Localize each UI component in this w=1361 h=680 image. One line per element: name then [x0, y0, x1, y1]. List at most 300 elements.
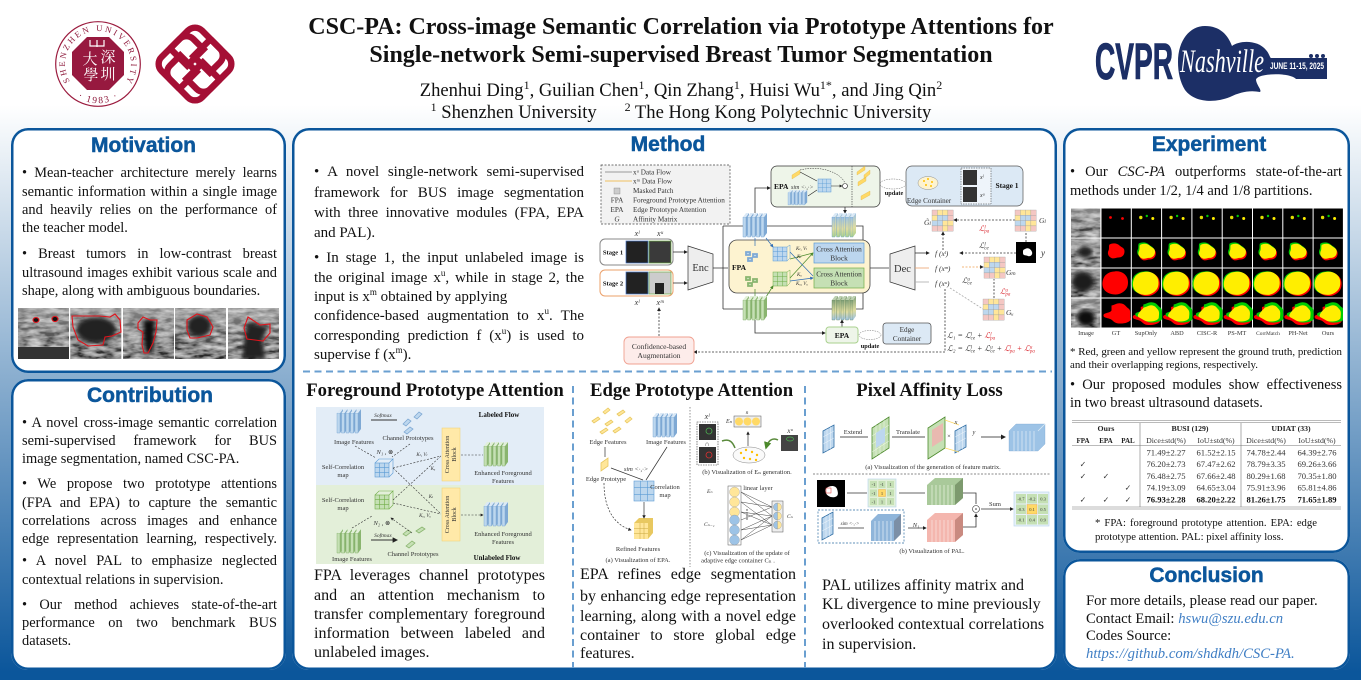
affinity matrices and predictions: Gᵤ [1006, 308, 1014, 317]
figure: EPA detail: (a) Visualization of EPA. [606, 557, 671, 564]
table: ablation results: IoU±std(%) [1197, 436, 1235, 445]
table: ablation results: ✓ [1080, 460, 1086, 469]
affinity matrices and predictions: G̃ₗ [924, 218, 931, 227]
text: FPA description: and an attention mechanism to [314, 587, 545, 604]
EPA lower and edge container: Edge [900, 326, 914, 334]
figure: EPA detail: sim <·,·> [624, 466, 648, 473]
figure: FPA detail: Kₗ [428, 495, 433, 500]
text: abbreviations note [1095, 517, 1317, 543]
authors: Zhenhui Ding1, Guilian Chen1, Qin Zhang1, Huisi Wu1*, and Jing Qin2 [420, 78, 942, 101]
text: method bullets: corresponding prediction f (xu) is used to [314, 326, 584, 344]
figure: FPA detail: Kₗ, Vₗ [415, 453, 428, 458]
stage inputs: Stage 2 [603, 280, 624, 288]
table: ablation results: 74.19±3.09 [1146, 482, 1186, 492]
loss formulas: pa [1029, 350, 1035, 354]
text: EPA description: learning, along with a novel edge [580, 608, 796, 625]
text: PAL description: overlooked contextual correlations [822, 616, 1044, 633]
figure: segmentation comparison grid: Image [1078, 330, 1094, 337]
figure: PAL detail: -0.3 [1017, 507, 1025, 512]
EPA lower and edge container: EPA [835, 331, 850, 340]
loss formulas: ℒ [984, 331, 990, 340]
text: FPA description: information between labeled and [314, 625, 545, 642]
affinity matrices and predictions: l [984, 226, 986, 230]
figure: EPA detail: Cₙ [787, 514, 793, 520]
logo: Shenzhen University seal: 學 [83, 64, 99, 85]
FPA block: Cross Attention [816, 270, 862, 278]
text: contribution bullets: correlations across images and enhance [22, 513, 277, 529]
figure: PAL detail: 1 [889, 482, 892, 487]
text: abbreviations note: * FPA: foreground prototype attention. EPA: edge [1095, 517, 1317, 529]
text: method bullets: confidence-based augmentation to xu. The [314, 306, 584, 324]
table: ablation results: 75.91±3.96 [1246, 482, 1286, 492]
text: contribution bullets: • A novel PAL to emphasize neglected [22, 553, 277, 569]
loss formulas: ℒ₂ = ℒ [947, 344, 971, 353]
text: colour note: and their overlapping regions, respectively. [1070, 359, 1258, 371]
logo: CVPR Nashville guitar [1095, 26, 1327, 101]
text: motivation bullets: ultrasound images exhibit various scale and [22, 265, 277, 281]
loss formulas: ce [971, 350, 976, 354]
figure: PAL detail: (a) Visualization of the generation of feature matrix. [865, 464, 1001, 471]
FPA block: FPA [732, 263, 747, 272]
loss formulas: ℒ₁ = ℒ [947, 331, 971, 340]
title [308, 14, 1054, 68]
figure: FPA detail: Unlabeled Flow [474, 554, 521, 562]
loss formulas: ce [971, 336, 976, 342]
figure: FPA detail: Enhanced Foreground [474, 531, 533, 538]
figure: EPA detail: Correlation [650, 484, 681, 491]
table: ablation results: 71.49±2.27 [1146, 448, 1186, 458]
figure: EPA detail: Image Features [646, 439, 686, 446]
FPA block: Block [830, 278, 848, 288]
text: EPA description: EPA refines edge segmentation [580, 566, 796, 583]
text: method bullets: with three innovative modules (FPA, EPA [314, 205, 584, 221]
legend: FPA [611, 196, 624, 204]
affinity matrices and predictions: ℒ [979, 224, 984, 233]
heading: motivation: Motivation [91, 134, 196, 157]
logo: Shenzhen University seal: 圳 [100, 63, 116, 84]
table: ablation results: 61.52±2.15 [1196, 448, 1236, 458]
figure: FPA detail: Image Features [332, 556, 372, 563]
affinity matrices and predictions: ℒ [962, 276, 967, 285]
text: experiment intro: • Our CSC-PA outperforms state-of-the-art [1070, 164, 1342, 180]
table: ablation results: 64.65±3.04 [1196, 482, 1236, 492]
affinity matrices and predictions: f (xᵘ) [935, 279, 950, 288]
loss formulas: l [1010, 346, 1012, 350]
figure: segmentation comparison grid: PS-MT [1228, 330, 1246, 337]
figure: EPA detail: Edge Prototype [586, 476, 626, 483]
table: ablation results: 80.29±1.68 [1246, 471, 1286, 481]
figure: EPA detail: (c) Visualization of the update of [704, 550, 791, 557]
EPA lower and edge container: Container [893, 335, 922, 343]
figure: PAL detail: -0.1 [1017, 518, 1025, 522]
stage inputs: xˡ [634, 229, 640, 238]
figure: PAL detail: 0.1 [1029, 507, 1035, 512]
legend [601, 165, 730, 224]
confidence-based augmentation: Augmentation [638, 351, 681, 360]
text: contribution bullets: (FPA and EPA) to capture the semantic [22, 495, 277, 511]
FPA block: Block [830, 254, 848, 262]
text: contribution bullets: • Our method achieves state-of-the-art [22, 597, 277, 613]
figure: PAL detail: -1 [872, 500, 875, 504]
affinity matrices and predictions: y [1040, 248, 1045, 258]
text: method bullets: input is xm obtained by applying [314, 287, 507, 305]
table: ablation results: 70.35±1.80 [1297, 471, 1337, 481]
text: method bullets: • A novel single-network semi-supervised [314, 164, 584, 180]
figure: PAL detail: × [947, 433, 951, 440]
text: PAL description [822, 577, 1044, 653]
text: FPA description: transfer complementary foreground [314, 606, 545, 623]
table: ablation results: Ours [1098, 424, 1114, 433]
heading: foreground prototype attention: Foreground Prototype Attention [306, 380, 564, 401]
text: method bullets [314, 164, 584, 363]
table: ablation results: Dice±std(%) [1146, 436, 1186, 445]
figure: FPA detail [316, 407, 544, 564]
figure: PAL detail: -1 [872, 482, 875, 487]
figure: PAL detail: 1 [881, 491, 883, 496]
heading: edge prototype attention: Edge Prototype Attention [590, 380, 793, 401]
FPA block: Kᵤ, Vᵤ [795, 282, 808, 287]
logo: Shenzhen University seal: 深 [100, 46, 116, 67]
loss formulas: l [971, 332, 973, 338]
affinity matrices and predictions: ℒ [979, 241, 984, 250]
figure: PAL detail: -0.7 [1017, 496, 1025, 502]
table: ablation results: Dice±std(%) [1246, 436, 1286, 445]
table: ablation results: ✓ [1080, 472, 1086, 481]
divider [303, 370, 1052, 668]
FPA block: Kₗ [796, 255, 802, 260]
table: ablation results: 67.66±2.48 [1196, 471, 1236, 481]
confidence-based augmentation [624, 337, 694, 364]
heading: experiment: Experiment [1152, 133, 1266, 156]
figure: FPA detail: Softmax [374, 532, 392, 539]
text: EPA description [580, 566, 796, 662]
figure: EPA detail: adaptive edge container Cₙ . [701, 558, 775, 564]
panel: conclusion [1063, 559, 1350, 670]
stage inputs: Stage 1 [603, 250, 623, 256]
affinity matrices and predictions: pa [983, 230, 990, 234]
affinity matrices and predictions: u [967, 278, 970, 282]
loss formulas: + [995, 344, 1004, 353]
text: experiment intro: methods under 1/2, 1/4 and 1/8 partitions. [1070, 183, 1312, 199]
encoder and decoder: Dec [894, 264, 911, 275]
stage inputs: xᵐ [656, 298, 664, 307]
text: contribution bullets: image segmentation, named CSC-PA. [22, 451, 239, 467]
panel: contribution [11, 379, 286, 670]
figure: EPA detail: ∩ [705, 441, 709, 448]
legend: xᵘ Data Flow [633, 168, 672, 176]
text: experiment second bullet [1070, 377, 1342, 411]
heading: conclusion: Conclusion [1149, 564, 1264, 587]
loss formulas: + ℒ [975, 344, 990, 353]
figure: PAL detail: -0.2 [1028, 496, 1036, 502]
figure: EPA detail: Cₙ₋₁ [704, 522, 715, 528]
table: ablation results: UDIAT (33) [1271, 424, 1311, 433]
legend: Edge Prototype Attention [633, 206, 706, 214]
loss formulas: + [975, 331, 984, 340]
figure: FPA detail: Self-Correlation [322, 497, 365, 504]
FPA block [729, 238, 870, 297]
figure: PAL detail: Extend [844, 429, 863, 436]
affinity matrices and predictions [924, 210, 1046, 320]
text: FPA description: unlabeled images. [314, 644, 430, 661]
stage 1 edge container: xᵘ [979, 193, 985, 199]
EPA upper panel: sim <·,·> [791, 185, 813, 191]
panel: method [292, 128, 1057, 670]
figure: PAL detail: (b) Visualization of PAL. [899, 548, 965, 555]
panel: motivation [11, 128, 286, 373]
table: ablation results: ✓ [1125, 484, 1131, 492]
confidence-based augmentation: Confidence-based [632, 342, 686, 351]
text: colour note: * Red, green and yellow represent the ground truth, prediction [1070, 346, 1342, 358]
figure: segmentation comparison grid: GT [1112, 330, 1120, 337]
logo: Shenzhen University seal: SHENZHEN UNIVERSITY [59, 25, 137, 84]
text: experiment intro [1070, 164, 1342, 199]
heading: method: Method [631, 133, 705, 156]
loss formulas: u [1030, 346, 1033, 350]
text: method bullets: and PAL). [314, 225, 375, 241]
figure: FPA detail: N₂ , ⊗ [373, 520, 390, 527]
loss formulas: ce [990, 350, 995, 354]
table: ablation results: 76.20±2.73 [1146, 459, 1186, 469]
figure: FPA detail: Labeled Flow [479, 411, 520, 419]
figure: FPA detail: map [337, 472, 349, 479]
figure: segmentation comparison grid: CISC-R [1197, 330, 1218, 337]
legend: Foreground Prototype Attention [633, 196, 725, 204]
figure: PAL detail: 0.9 [1040, 518, 1047, 522]
table: ablation results: 78.79±3.35 [1246, 459, 1286, 469]
logo: CVPR Nashville guitar: Nashville [1179, 44, 1264, 80]
text: contribution bullets: semi-supervised framework for BUS [22, 433, 277, 449]
figure: PAL detail: 0.4 [1029, 518, 1036, 522]
text: method bullets: the original image xu, while in stage 2, the [314, 268, 584, 286]
text: conclusion links [1086, 593, 1318, 662]
affinity matrices and predictions: l [984, 242, 986, 248]
text: contribution bullets: performance on two benchmark BUS [22, 615, 277, 631]
text: motivation bullets: shape, along with ambiguous boundaries. [22, 283, 260, 299]
table: ablation results: 65.81±4.86 [1297, 482, 1337, 492]
chart: method architecture diagram [600, 164, 1046, 364]
encoder and decoder: Enc [692, 263, 709, 274]
text: motivation bullets: • Mean-teacher architecture merely learns [22, 165, 277, 181]
figure: FPA detail: Features [492, 539, 514, 546]
affinity matrices and predictions: ce [967, 282, 973, 286]
legend: G [614, 216, 620, 224]
figure: FPA detail: Image Features [334, 439, 374, 446]
figure: EPA detail: xᵘ [786, 427, 794, 435]
text: contribution bullets: • A novel cross-image semantic correlation [22, 415, 277, 431]
figure: FPA detail: Block [452, 507, 458, 522]
affiliations: 1 Shenzhen University 2 The Hong Kong Polytechnic University [431, 100, 931, 123]
legend: Masked Patch [633, 187, 674, 195]
figure: EPA detail: Edge Features [589, 439, 627, 446]
figure: FPA detail: Channel Prototypes [382, 435, 434, 442]
figure: EPA detail: Eₙ [706, 489, 713, 495]
legend: EPA [611, 206, 624, 214]
figure: segmentation comparison grid [1071, 208, 1343, 337]
figure: FPA detail: Softmax [374, 412, 392, 419]
text: FPA description [314, 567, 545, 661]
figure: PAL detail: -1 [880, 482, 884, 487]
loss formulas: l [990, 332, 992, 338]
logo: Hong Kong Polytechnic University [155, 24, 234, 104]
table: ablation results [1072, 420, 1341, 510]
figure: PAL detail: Sum [989, 501, 1001, 508]
affinity matrices and predictions: pa [1004, 292, 1011, 298]
legend: xᵐ Data Flow [633, 178, 673, 186]
text: motivation bullets: semantic information within a single image [22, 184, 277, 200]
text: method bullets: • In stage 1, the input unlabeled image is [314, 250, 584, 266]
flow arrows [659, 188, 1026, 352]
heading: pixel affinity loss: Pixel Affinity Loss [856, 380, 1003, 401]
FPA block: Cross Attention [816, 244, 862, 254]
table: ablation results: ✓ [1103, 496, 1109, 504]
table: ablation results: 69.26±3.66 [1297, 459, 1337, 469]
EPA upper panel: EPA [774, 182, 789, 191]
stage inputs [600, 229, 673, 307]
figure: ultrasound examples [18, 308, 279, 359]
figure: segmentation comparison grid: PH-Net [1288, 330, 1308, 337]
figure: PAL detail: sim <·,·> [841, 522, 859, 527]
text: FPA description: FPA leverages channel prototypes [314, 567, 545, 584]
figure: FPA detail: Features [492, 478, 514, 485]
figure: FPA detail: Cross Attention [445, 496, 451, 533]
stage 1 edge container: Stage 1 [995, 181, 1019, 190]
affinity matrices and predictions: Gₗ [1039, 216, 1046, 225]
figure: FPA detail: Block [452, 447, 458, 462]
text: EPA description: container to store global edge [580, 627, 796, 644]
table: ablation results: PAL [1121, 437, 1135, 445]
figure: FPA detail: Kᵤ, Vᵤ [418, 514, 431, 519]
figure: FPA detail: Self-Correlation [322, 464, 365, 471]
table: ablation results: ✓ [1080, 496, 1086, 504]
stage 1 edge container: Edge Container [907, 197, 952, 205]
text: experiment second bullet: in two breast ultrasound datasets. [1070, 395, 1263, 411]
panel: experiment [1063, 128, 1350, 553]
affinity matrices and predictions: ℒ [1000, 287, 1005, 296]
affinity matrices and predictions: Gₘ [1006, 268, 1016, 277]
EPA lower and edge container: update [861, 343, 879, 350]
figure: PAL detail: 1 [889, 500, 892, 504]
feature stacks [743, 213, 856, 320]
figure: EPA detail: map [659, 492, 671, 499]
text: experiment second bullet: • Our proposed modules show effectiveness [1070, 377, 1342, 393]
text: motivation bullets [22, 165, 278, 299]
affinity matrices and predictions: u [1005, 288, 1008, 294]
loss formulas: pa [989, 336, 996, 342]
figure: FPA detail: Cross Attention [445, 436, 451, 473]
loss formulas: l [971, 346, 973, 350]
text: contribution bullets: • We propose two prototype attentions [22, 476, 277, 492]
figure: PAL detail: 1 [889, 491, 892, 496]
text: motivation bullets: and heavily relies on the performance of [22, 202, 277, 218]
table: ablation results: FPA [1076, 437, 1090, 445]
figure: segmentation comparison grid: CorrMatch [1256, 331, 1280, 337]
EPA upper panel [771, 166, 906, 207]
EPA lower and edge container [826, 323, 931, 350]
figure: EPA detail: linear layer [743, 485, 774, 492]
figure: EPA detail: (b) Visualization of Eₙ generation. [702, 469, 792, 476]
text: conclusion links: Contact Email: hswu@szu.edu.cn [1086, 611, 1283, 627]
figure: EPA detail: Refined Features [616, 546, 661, 553]
text: conclusion links: https://github.com/shdkdh/CSC-PA. [1086, 646, 1295, 662]
figure: FPA detail: Enhanced Foreground [474, 470, 533, 477]
table: ablation results: BUSI (129) [1171, 424, 1209, 433]
loss formulas: + ℒ [1015, 344, 1030, 353]
figure: segmentation comparison grid: SupOnly [1135, 330, 1158, 337]
text: PAL description: in supervision. [822, 636, 916, 653]
figure: PAL detail: 0.5 [1040, 507, 1047, 512]
title: Single-network Semi-supervised Breast Tumor Segmentation [369, 42, 993, 68]
table: ablation results: 71.65±1.89 [1297, 494, 1337, 504]
figure: PAL detail: y [972, 429, 976, 436]
text: contribution bullets [22, 415, 277, 649]
FPA block: Kₗ, Vₗ [795, 247, 807, 252]
text: contribution bullets: edge representation learning, respectively. [22, 531, 277, 547]
EPA upper panel: update [885, 190, 903, 197]
stage inputs: xˡ [634, 298, 640, 307]
table: ablation results: 67.47±2.62 [1196, 459, 1236, 469]
figure: EPA detail: xˡ [704, 412, 710, 421]
figure: FPA detail: Kᵤ [430, 467, 436, 472]
text: method bullets: supervise f (xm). [314, 345, 411, 363]
text: motivation bullets: • Breast tumors in low-contrast breast [22, 246, 277, 262]
table: ablation results: ✓ [1103, 472, 1109, 481]
logo: Shenzhen University seal [55, 21, 141, 107]
stage 1 edge container: xˡ [979, 175, 985, 181]
figure: EPA detail [586, 407, 798, 567]
figure: EPA detail: n [746, 410, 749, 416]
text: method bullets: framework for BUS image segmentation [314, 185, 584, 201]
figure: PAL detail: x [954, 419, 958, 426]
table: ablation results: 76.93±2.28 [1146, 494, 1186, 504]
text: PAL description: PAL utilizes affinity matrix and [822, 577, 1024, 594]
text: contribution bullets: contextual relations in supervision. [22, 572, 223, 588]
logo: CVPR Nashville guitar: CVPR [1095, 33, 1173, 90]
text: conclusion links: For more details, please read our paper. [1086, 593, 1318, 609]
logo: Shenzhen University seal: 大 [82, 48, 98, 69]
text: conclusion links: Codes Source: [1086, 628, 1171, 644]
affinity matrices and predictions: f (xᵐ) [935, 264, 951, 273]
text: contribution bullets: datasets. [22, 633, 71, 649]
table: ablation results: EPA [1099, 437, 1113, 445]
figure: PAL detail: 1 [881, 500, 883, 504]
figure: PAL detail [813, 416, 1050, 555]
text: EPA description: features. [580, 645, 635, 662]
logo: Shenzhen University seal: · 1983 · [80, 94, 116, 104]
loss formulas [947, 331, 1035, 354]
figure: PAL detail: -1 [872, 491, 875, 496]
figure: segmentation comparison grid: ABD [1170, 330, 1184, 337]
text: EPA description: by enhancing edge representation [580, 588, 796, 605]
figure: EPA detail: Eₙ [725, 419, 733, 425]
figure: FPA detail: Channel Prototypes [387, 551, 439, 558]
figure: PAL detail: Translate [896, 429, 920, 436]
text: abbreviations note: prototype attention. PAL: pixel affinity loss. [1095, 531, 1284, 543]
title: CSC-PA: Cross-image Semantic Correlation via Prototype Attentions for [308, 14, 1054, 40]
table: ablation results: 81.26±1.75 [1246, 494, 1286, 504]
figure: segmentation comparison grid: Ours [1322, 330, 1335, 337]
table: ablation results: 76.48±2.75 [1146, 471, 1186, 481]
figure: FPA detail: map [337, 505, 349, 512]
loss formulas: pa [1009, 350, 1015, 354]
affinity matrices and predictions: f (xˡ) [935, 249, 949, 258]
text: PAL description: KL divergence to mine previously [822, 596, 1041, 613]
stage inputs: xᵘ [656, 229, 664, 238]
figure: PAL detail: 0.3 [1040, 496, 1047, 502]
table: ablation results: 68.20±2.22 [1196, 494, 1236, 504]
FPA block: Kᵤ [796, 273, 802, 278]
table: ablation results: 74.78±2.44 [1246, 448, 1286, 458]
